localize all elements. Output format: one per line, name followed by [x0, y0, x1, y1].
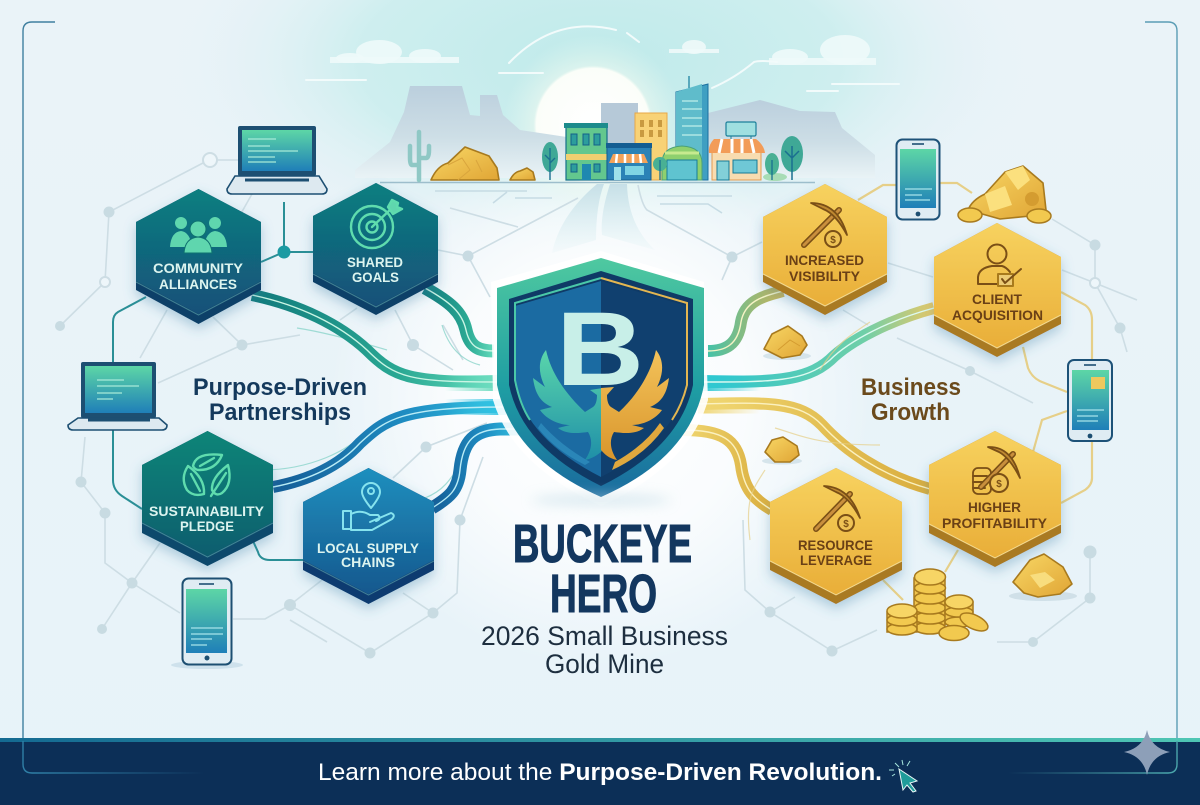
ribbon: resource leverage: [683, 430, 772, 510]
thin swooshes right: [748, 322, 880, 540]
hexagon: community alliances: [136, 189, 261, 324]
heading: business growth: Business: [861, 374, 961, 401]
phoenix left wing: [533, 350, 603, 460]
icon: phone right: [1068, 360, 1112, 441]
hexagon: higher profitability: HIGHER: [968, 499, 1021, 515]
small gold rock: [510, 168, 535, 180]
hexagon: increased visibility: INCREASED: [785, 252, 864, 268]
blue shop: [606, 143, 652, 180]
hexagon: higher profitability: PROFITABILITY: [942, 515, 1048, 531]
green shop: [662, 146, 702, 180]
subtitle: 2026 Small Business: [481, 621, 728, 651]
hexagon: client acquisition: [934, 223, 1061, 357]
frame corner bottom right: [1008, 741, 1177, 773]
gold nugget middle: [763, 326, 811, 360]
hexagon: resource leverage: RESOURCE: [798, 537, 873, 553]
shield left face: [515, 281, 601, 477]
subtitle: Gold Mine: [545, 649, 664, 679]
green building: [564, 123, 608, 180]
connector lines: [113, 183, 1092, 600]
network lines: [55, 153, 1137, 658]
orange shop: [709, 122, 765, 180]
hexagon: community alliances: COMMUNITY: [153, 260, 244, 276]
icon: client check: [978, 244, 1021, 286]
icon: pickaxe with coin: $: [843, 519, 849, 530]
heading: business growth: Growth: [871, 399, 950, 426]
hexagon: sustainability pledge: SUSTAINABILITY: [149, 503, 265, 519]
flowing ribbons right: [683, 291, 934, 540]
hexagon: resource leverage: [770, 468, 902, 604]
hexagon: shared goals: GOALS: [352, 269, 399, 285]
hexagon: shared goals: SHARED: [347, 254, 403, 270]
gold rock: [431, 147, 499, 180]
icon: people: [170, 217, 227, 253]
subtitle: [481, 621, 728, 679]
shield navy layer: [509, 271, 693, 486]
road: [552, 184, 655, 253]
phoenix lower accents: [538, 423, 590, 465]
glass tower: [676, 76, 708, 180]
flowing ribbons left: [252, 288, 522, 508]
hexagon: increased visibility: VISIBILITY: [789, 268, 861, 284]
footer text: Learn more about the Purpose-Driven Revolution.: [318, 759, 882, 786]
icon: phone top right: [896, 140, 940, 220]
shield right face: [601, 281, 687, 477]
gold nugget bottom right: [1009, 554, 1077, 601]
hexagon: sustainability pledge: [142, 431, 273, 566]
hexagon: local supply chains: LOCAL SUPPLY: [317, 540, 420, 556]
title: Buckeye Hero: HERO: [550, 564, 657, 624]
gold coin stacks: [887, 569, 991, 640]
ribbon: community alliances: [252, 295, 498, 383]
footer banner: [0, 730, 1200, 805]
icon: pickaxe with coins: $: [996, 479, 1002, 490]
small tree: [653, 157, 667, 180]
shield trim: [515, 278, 601, 420]
cactus: [410, 132, 429, 180]
gold rock top right: [958, 166, 1051, 223]
hexagon: community alliances: ALLIANCES: [159, 276, 237, 292]
grey tower: [601, 103, 638, 145]
yellow building: [635, 113, 667, 180]
ribbon: sustainability: [273, 407, 506, 487]
hexagon: local supply chains: [303, 468, 434, 604]
heading: business growth: [861, 374, 961, 426]
ribbon: local supply: [432, 429, 522, 508]
hexagon: local supply chains: CHAINS: [341, 554, 395, 570]
sky arcs: [306, 26, 899, 91]
small right tree: [763, 153, 787, 181]
icon: phone bottom left: [171, 578, 243, 669]
ribbon: higher profitability: [698, 403, 930, 489]
hexagon: resource leverage: LEVERAGE: [800, 552, 872, 568]
hexagon: higher profitability: [929, 431, 1061, 567]
central shield logo: [491, 251, 708, 506]
mesa mountains left: [355, 86, 600, 178]
heading: purpose-driven partnerships: Partnerships: [209, 399, 351, 426]
frame corner bottom left: [23, 741, 205, 773]
icon: laptop left: [68, 362, 167, 430]
hexagon: increased visibility: [763, 184, 887, 315]
icon: leaves: [184, 454, 230, 496]
shield ground glow: [531, 494, 671, 506]
icon: pin and hand: [343, 483, 394, 530]
desert town scene: [306, 26, 899, 253]
ribbon: shared goals: [425, 288, 494, 351]
gold nugget lower: [762, 437, 802, 464]
hexagon: client acquisition: ACQUISITION: [952, 307, 1043, 323]
phoenix right wing: [601, 350, 669, 460]
thin swooshes left: [262, 325, 480, 498]
title: Buckeye Hero: [513, 514, 692, 624]
icon: target: [351, 200, 402, 248]
heading: purpose-driven partnerships: Purpose-Driven: [193, 374, 367, 401]
letter B: B: [556, 291, 644, 408]
ribbon: increased visibility: [708, 291, 783, 351]
phoenix: [533, 350, 669, 460]
icon: cursor: [889, 760, 917, 792]
icon: pickaxe with coin: $: [830, 235, 836, 246]
shield halo: [491, 251, 708, 506]
mountains right: [700, 100, 875, 178]
clouds: [330, 35, 876, 65]
sparkle: [1124, 730, 1170, 775]
shield outer band: [497, 258, 704, 497]
hexagon: shared goals: [313, 183, 438, 315]
hexagon: sustainability pledge: PLEDGE: [180, 518, 234, 534]
right tree: [781, 136, 803, 180]
ribbon: client acquisition: [702, 308, 934, 383]
title: Buckeye Hero: BUCKEYE: [513, 514, 692, 574]
icon: laptop top: [227, 126, 327, 194]
hexagon: client acquisition: CLIENT: [972, 291, 1022, 307]
tree: [542, 142, 558, 180]
heading: purpose-driven partnerships: [193, 374, 367, 426]
ground lines: [380, 182, 815, 213]
sun: [503, 35, 683, 215]
